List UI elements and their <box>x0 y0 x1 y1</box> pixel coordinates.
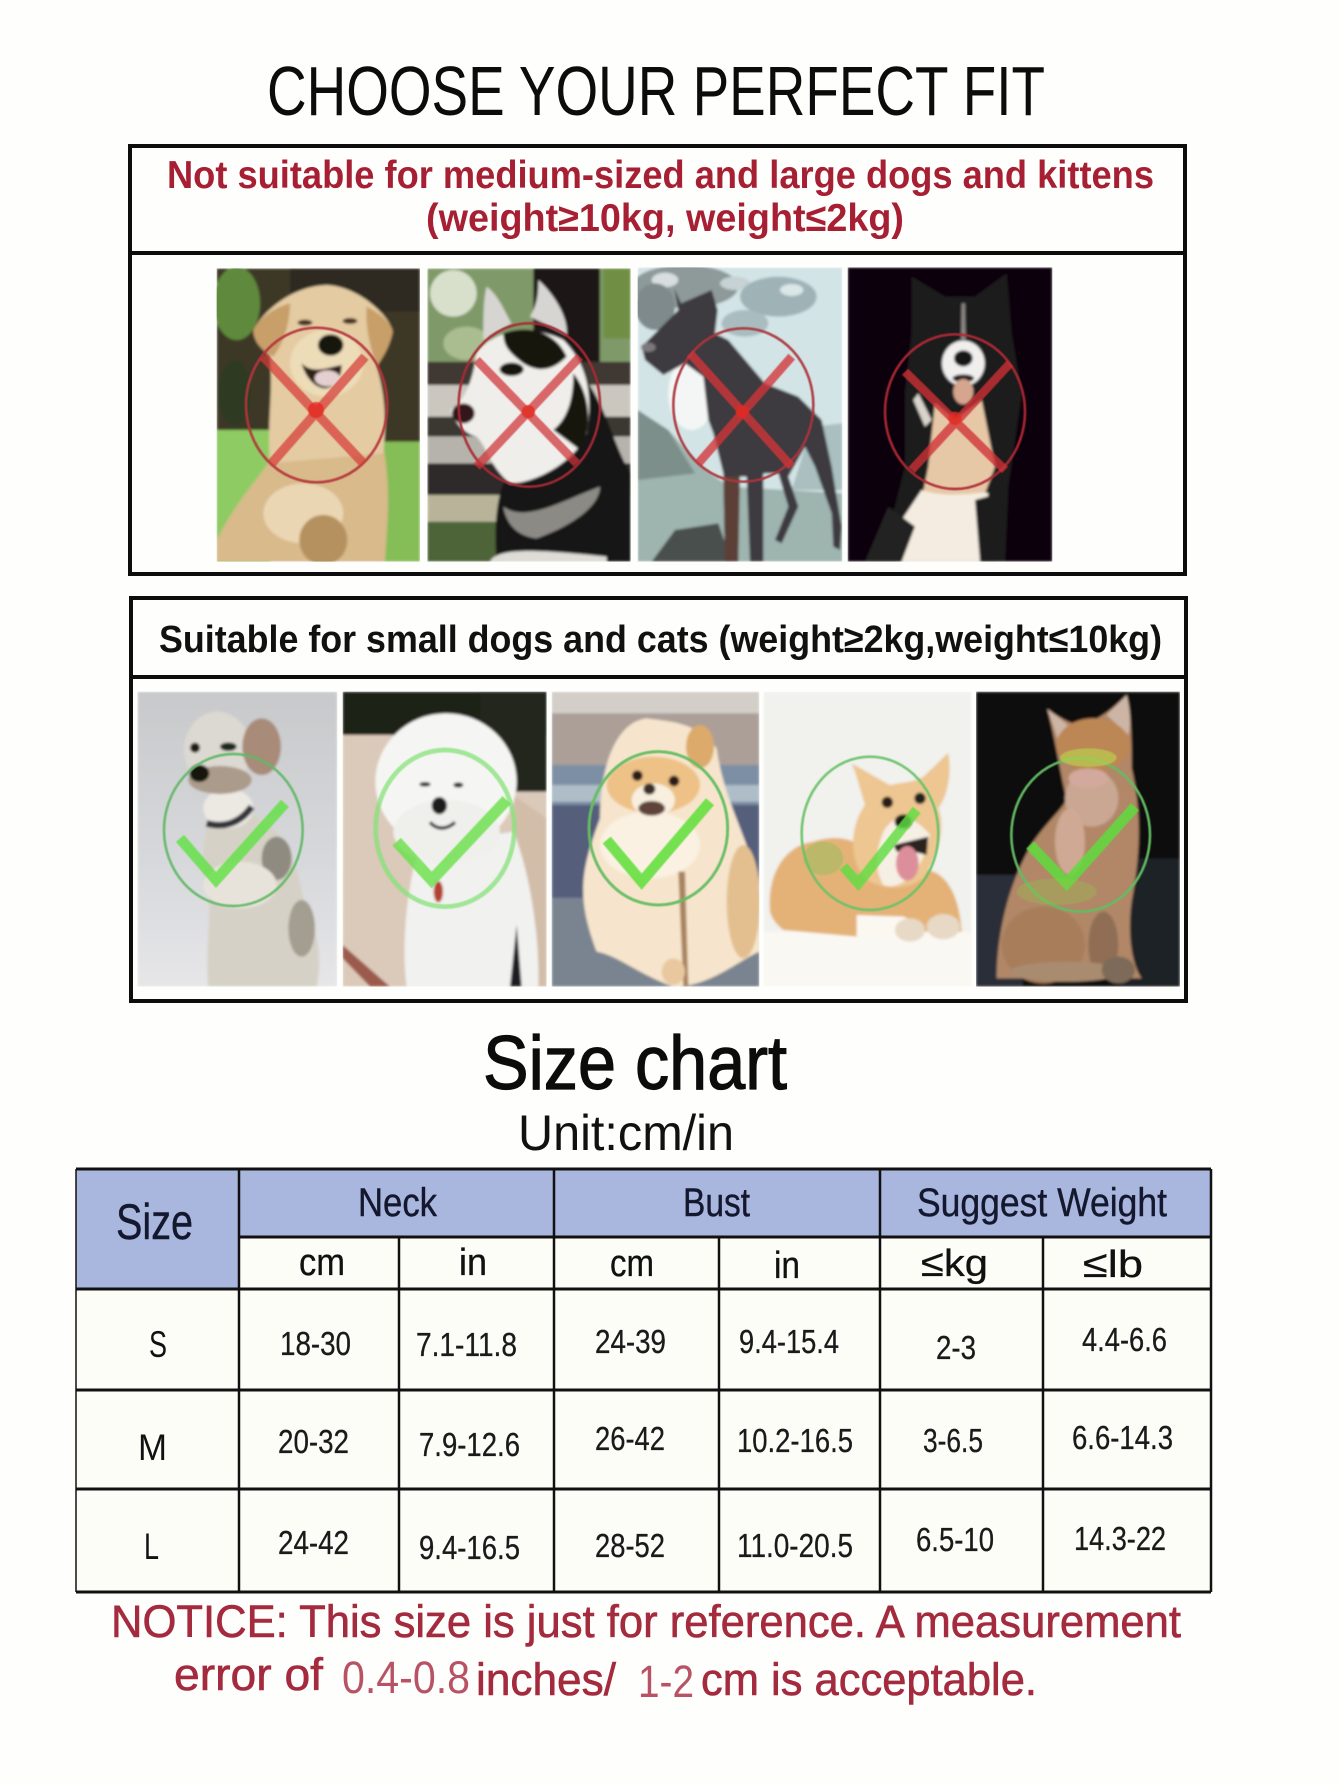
unit labels: ≤kg <box>921 1243 988 1285</box>
unit labels: cm <box>610 1243 654 1285</box>
row: L: 28-52 <box>595 1527 665 1564</box>
header labels: Neck <box>358 1181 438 1225</box>
photo: white fluffy dog with green check <box>343 692 547 987</box>
row: S: 4.4-6.6 <box>1082 1321 1167 1358</box>
row: M: 26-42 <box>595 1420 665 1457</box>
row: L: 24-42 <box>278 1524 349 1561</box>
photo: poodle mix with green check <box>137 692 337 987</box>
photo: great dane with red cross <box>632 265 842 562</box>
row: L <box>144 1520 1166 1567</box>
row: M: 10.2-16.5 <box>737 1422 853 1459</box>
unit labels: cm <box>299 1242 345 1284</box>
unit labels: in <box>774 1245 800 1287</box>
notice text: NOTICE: This size is just for reference. A measurement <box>111 1596 1181 1647</box>
row: M: 7.9-12.6 <box>419 1426 520 1463</box>
notice text: 0.4-0.8 <box>342 1652 470 1703</box>
text: unit: Unit:cm/in <box>518 1105 734 1161</box>
table header band <box>76 1169 1211 1289</box>
notice text: 1-2 <box>638 1656 694 1707</box>
photo: corgi with green check <box>763 692 972 987</box>
row: L: L <box>144 1526 159 1567</box>
heading: not suitable warning: (weight≥10kg, weight≤2kg) <box>426 197 904 240</box>
row: S: 9.4-15.4 <box>739 1323 839 1360</box>
row: S: 18-30 <box>280 1325 351 1362</box>
header labels <box>116 1181 1167 1250</box>
row: M: M <box>138 1427 167 1468</box>
notice text: inches/ <box>476 1654 616 1705</box>
photo: border collie with red cross <box>848 267 1052 562</box>
title: CHOOSE YOUR PERFECT FIT <box>267 52 1045 130</box>
row: S: 24-39 <box>595 1323 666 1360</box>
row: M: 3-6.5 <box>923 1422 983 1459</box>
row: M: 20-32 <box>278 1423 349 1460</box>
heading: not suitable warning <box>167 154 1154 240</box>
infographic page <box>75 66 1212 1705</box>
heading: not suitable warning: Not suitable for medium-sized and large dogs and kittens <box>167 154 1154 197</box>
unit labels <box>299 1242 1143 1287</box>
row: S <box>149 1321 1167 1366</box>
notice text <box>111 1596 1181 1707</box>
header labels: Bust <box>683 1181 750 1225</box>
row: L: 11.0-20.5 <box>737 1527 853 1564</box>
row: L: 6.5-10 <box>916 1521 994 1558</box>
size table <box>76 1169 1211 1592</box>
panel: suitable <box>131 598 1186 1001</box>
unit labels: in <box>459 1242 487 1284</box>
panel: not suitable <box>130 146 1185 574</box>
photo: pomeranian with green check <box>552 692 760 987</box>
row: S: 7.1-11.8 <box>416 1326 517 1363</box>
row: M: 6.6-14.3 <box>1072 1419 1173 1456</box>
row: S: S <box>149 1324 167 1365</box>
heading: size chart: Size chart <box>483 1021 787 1106</box>
photo: golden retriever with red cross <box>213 267 420 565</box>
header labels: Suggest Weight <box>917 1181 1167 1225</box>
row: S: 2-3 <box>936 1329 976 1366</box>
photo: husky with red cross <box>427 268 631 562</box>
row: M <box>138 1419 1173 1468</box>
header labels: Size <box>116 1194 193 1250</box>
row: L: 14.3-22 <box>1074 1520 1166 1557</box>
notice text: cm is acceptable. <box>701 1654 1037 1705</box>
photo: tabby cat with green check <box>976 692 1180 987</box>
heading: suitable pets: Suitable for small dogs and cats (weight≥2kg,weight≤10kg) <box>159 619 1162 661</box>
row: L: 9.4-16.5 <box>419 1529 520 1566</box>
unit labels: ≤lb <box>1083 1244 1143 1286</box>
notice text: error of <box>174 1649 324 1700</box>
